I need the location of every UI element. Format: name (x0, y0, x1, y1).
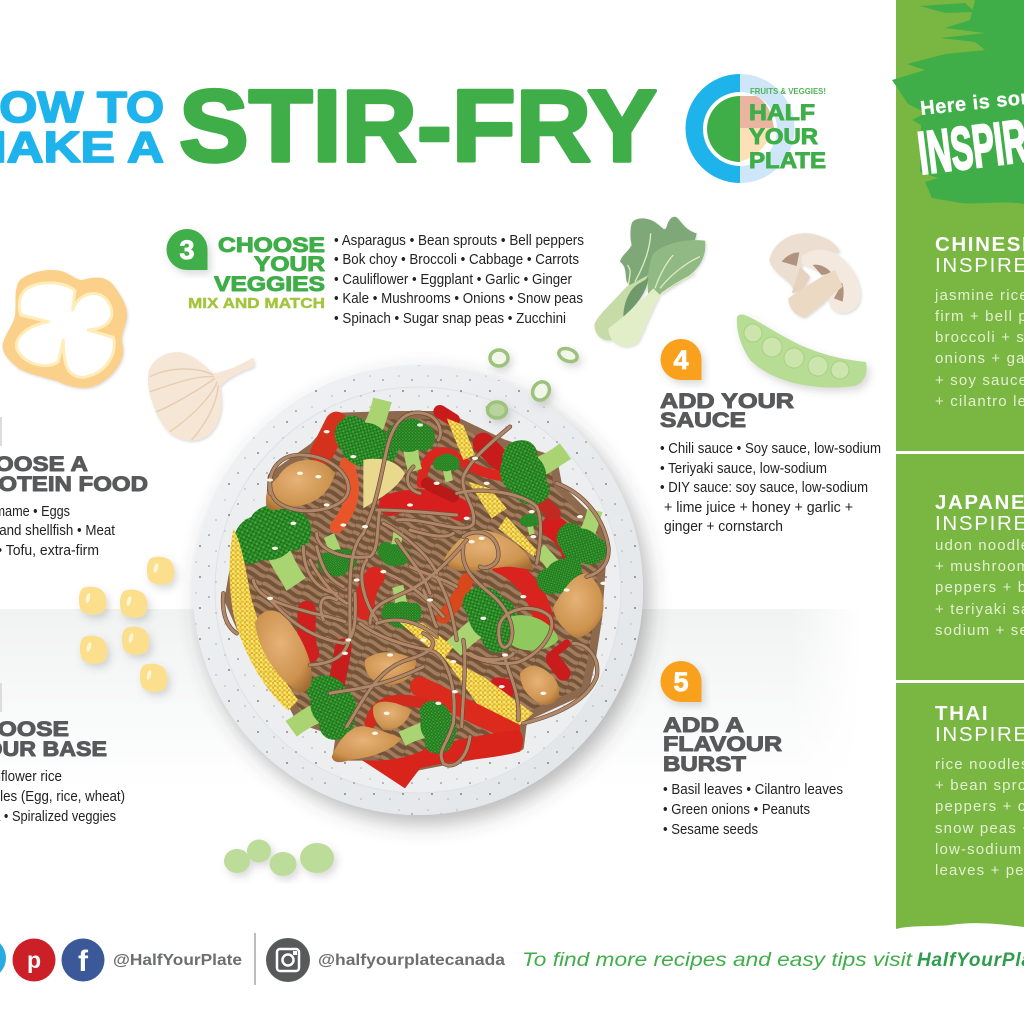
website call to action: To find more recipes and easy tips visit (522, 950, 913, 971)
bowl of stir-fry (193, 365, 643, 815)
sauce list: + lime juice + honey + garlic + (664, 499, 853, 516)
veggie list: • Kale • Mushrooms • Onions • Snow peas (334, 290, 583, 307)
badge 4: 4 (673, 345, 689, 375)
thai inspired (935, 702, 1024, 879)
icon: pinterest (12, 938, 56, 982)
footer (0, 937, 1024, 982)
panel background (896, 0, 1024, 929)
base list (0, 768, 125, 825)
food base (228, 415, 602, 782)
sauce list (660, 440, 881, 535)
heading: ADD YOUR (660, 390, 794, 413)
heading (188, 234, 325, 312)
badge edge (0, 417, 2, 446)
veggie list (334, 232, 584, 327)
heading (660, 390, 794, 432)
thai inspired: THAI (935, 702, 989, 725)
logo: half your plate: HALF (749, 100, 815, 125)
heading (0, 718, 107, 761)
heading: VEGGIES (214, 273, 325, 296)
food (223, 384, 624, 788)
icon: bok choy (594, 217, 705, 346)
handle: instagram: @halfyourplatecanada (318, 952, 505, 969)
icon: snow pea (737, 315, 867, 388)
step 5: add a flavour burst (660, 661, 843, 838)
icon: green onion slices (488, 346, 579, 418)
flavour list: • Basil leaves • Cilantro leaves (663, 781, 843, 798)
heading: YOUR (254, 253, 325, 276)
step 1: choose your base (0, 683, 125, 825)
icon: instagram (266, 938, 310, 982)
chinese inspired (934, 233, 1024, 410)
icon: mushrooms (769, 233, 860, 317)
plate (193, 365, 643, 815)
sauce list: • Teriyaki sauce, low-sodium (660, 460, 827, 477)
step 2: choose a protein food (0, 417, 148, 559)
veggie list: • Cauliflower • Eggplant • Garlic • Ginger (334, 271, 572, 288)
step 3: choose your veggies (166, 229, 584, 327)
heading: BURST (663, 753, 746, 776)
flavour list: • Green onions • Peanuts (663, 801, 810, 818)
chicken (255, 460, 604, 762)
badge 5 (660, 661, 702, 702)
website call to action (522, 950, 1024, 971)
badge 5: 5 (673, 667, 689, 697)
heading (0, 453, 148, 496)
logo: half your plate: YOUR (749, 124, 818, 149)
icon: facebook (62, 938, 104, 982)
veggie list: • Spinach • Sugar snap peas • Zucchini (334, 310, 566, 327)
heading: MIX AND MATCH (188, 296, 325, 312)
icon: pinterest: p (27, 947, 41, 973)
step 4: add your sauce (660, 339, 881, 535)
red peppers (306, 412, 573, 728)
heading (663, 714, 782, 776)
icon: corn kernels (79, 557, 174, 692)
heading: FLAVOUR (663, 733, 782, 756)
sauce list: ginger + cornstarch (664, 518, 783, 535)
protein list (0, 503, 116, 559)
icon: facebook: f (78, 945, 89, 978)
background band (0, 609, 860, 789)
how to make a (0, 83, 164, 172)
sesame seeds (267, 423, 606, 735)
icon: garlic (148, 352, 254, 441)
broccoli (224, 384, 624, 760)
large red pepper (362, 730, 523, 788)
flavour list (663, 781, 843, 838)
baby corn (230, 418, 537, 725)
icon: bell pepper ring (3, 270, 127, 388)
icon: edamame beans (224, 840, 334, 876)
heading: SAUCE (660, 409, 746, 432)
heading: ADD A (663, 714, 744, 737)
badge edge (0, 683, 2, 712)
japanese inspired (935, 491, 1024, 639)
divider lines (896, 451, 1024, 683)
title (0, 69, 657, 183)
badge 4 (660, 339, 702, 380)
heading: CHOOSE (218, 234, 325, 257)
flavour list: • Sesame seeds (663, 821, 758, 838)
brush stroke (892, 0, 1024, 204)
handle: facebook: @HalfYourPlate (113, 952, 242, 969)
brush streak (920, 3, 975, 13)
badge 3: 3 (179, 235, 195, 265)
sauce list: • Chili sauce • Soy sauce, low-sodium (660, 440, 881, 457)
veggie list: • Bok choy • Broccoli • Cabbage • Carrots (334, 251, 579, 268)
badge 3 (166, 229, 208, 270)
veggie list: • Asparagus • Bean sprouts • Bell peppers (334, 232, 584, 249)
noodles (223, 413, 609, 765)
logo: half your plate (685, 74, 826, 183)
icon: twitter (0, 937, 6, 979)
panel: inspiration (892, 0, 1024, 929)
stir-fry: STIR-FRY (179, 69, 657, 183)
logo: half your plate: PLATE (749, 148, 826, 173)
logo: half your plate: FRUITS & VEGGIES! (750, 86, 826, 96)
sauce list: • DIY sauce: soy sauce, low-sodium (660, 479, 868, 496)
